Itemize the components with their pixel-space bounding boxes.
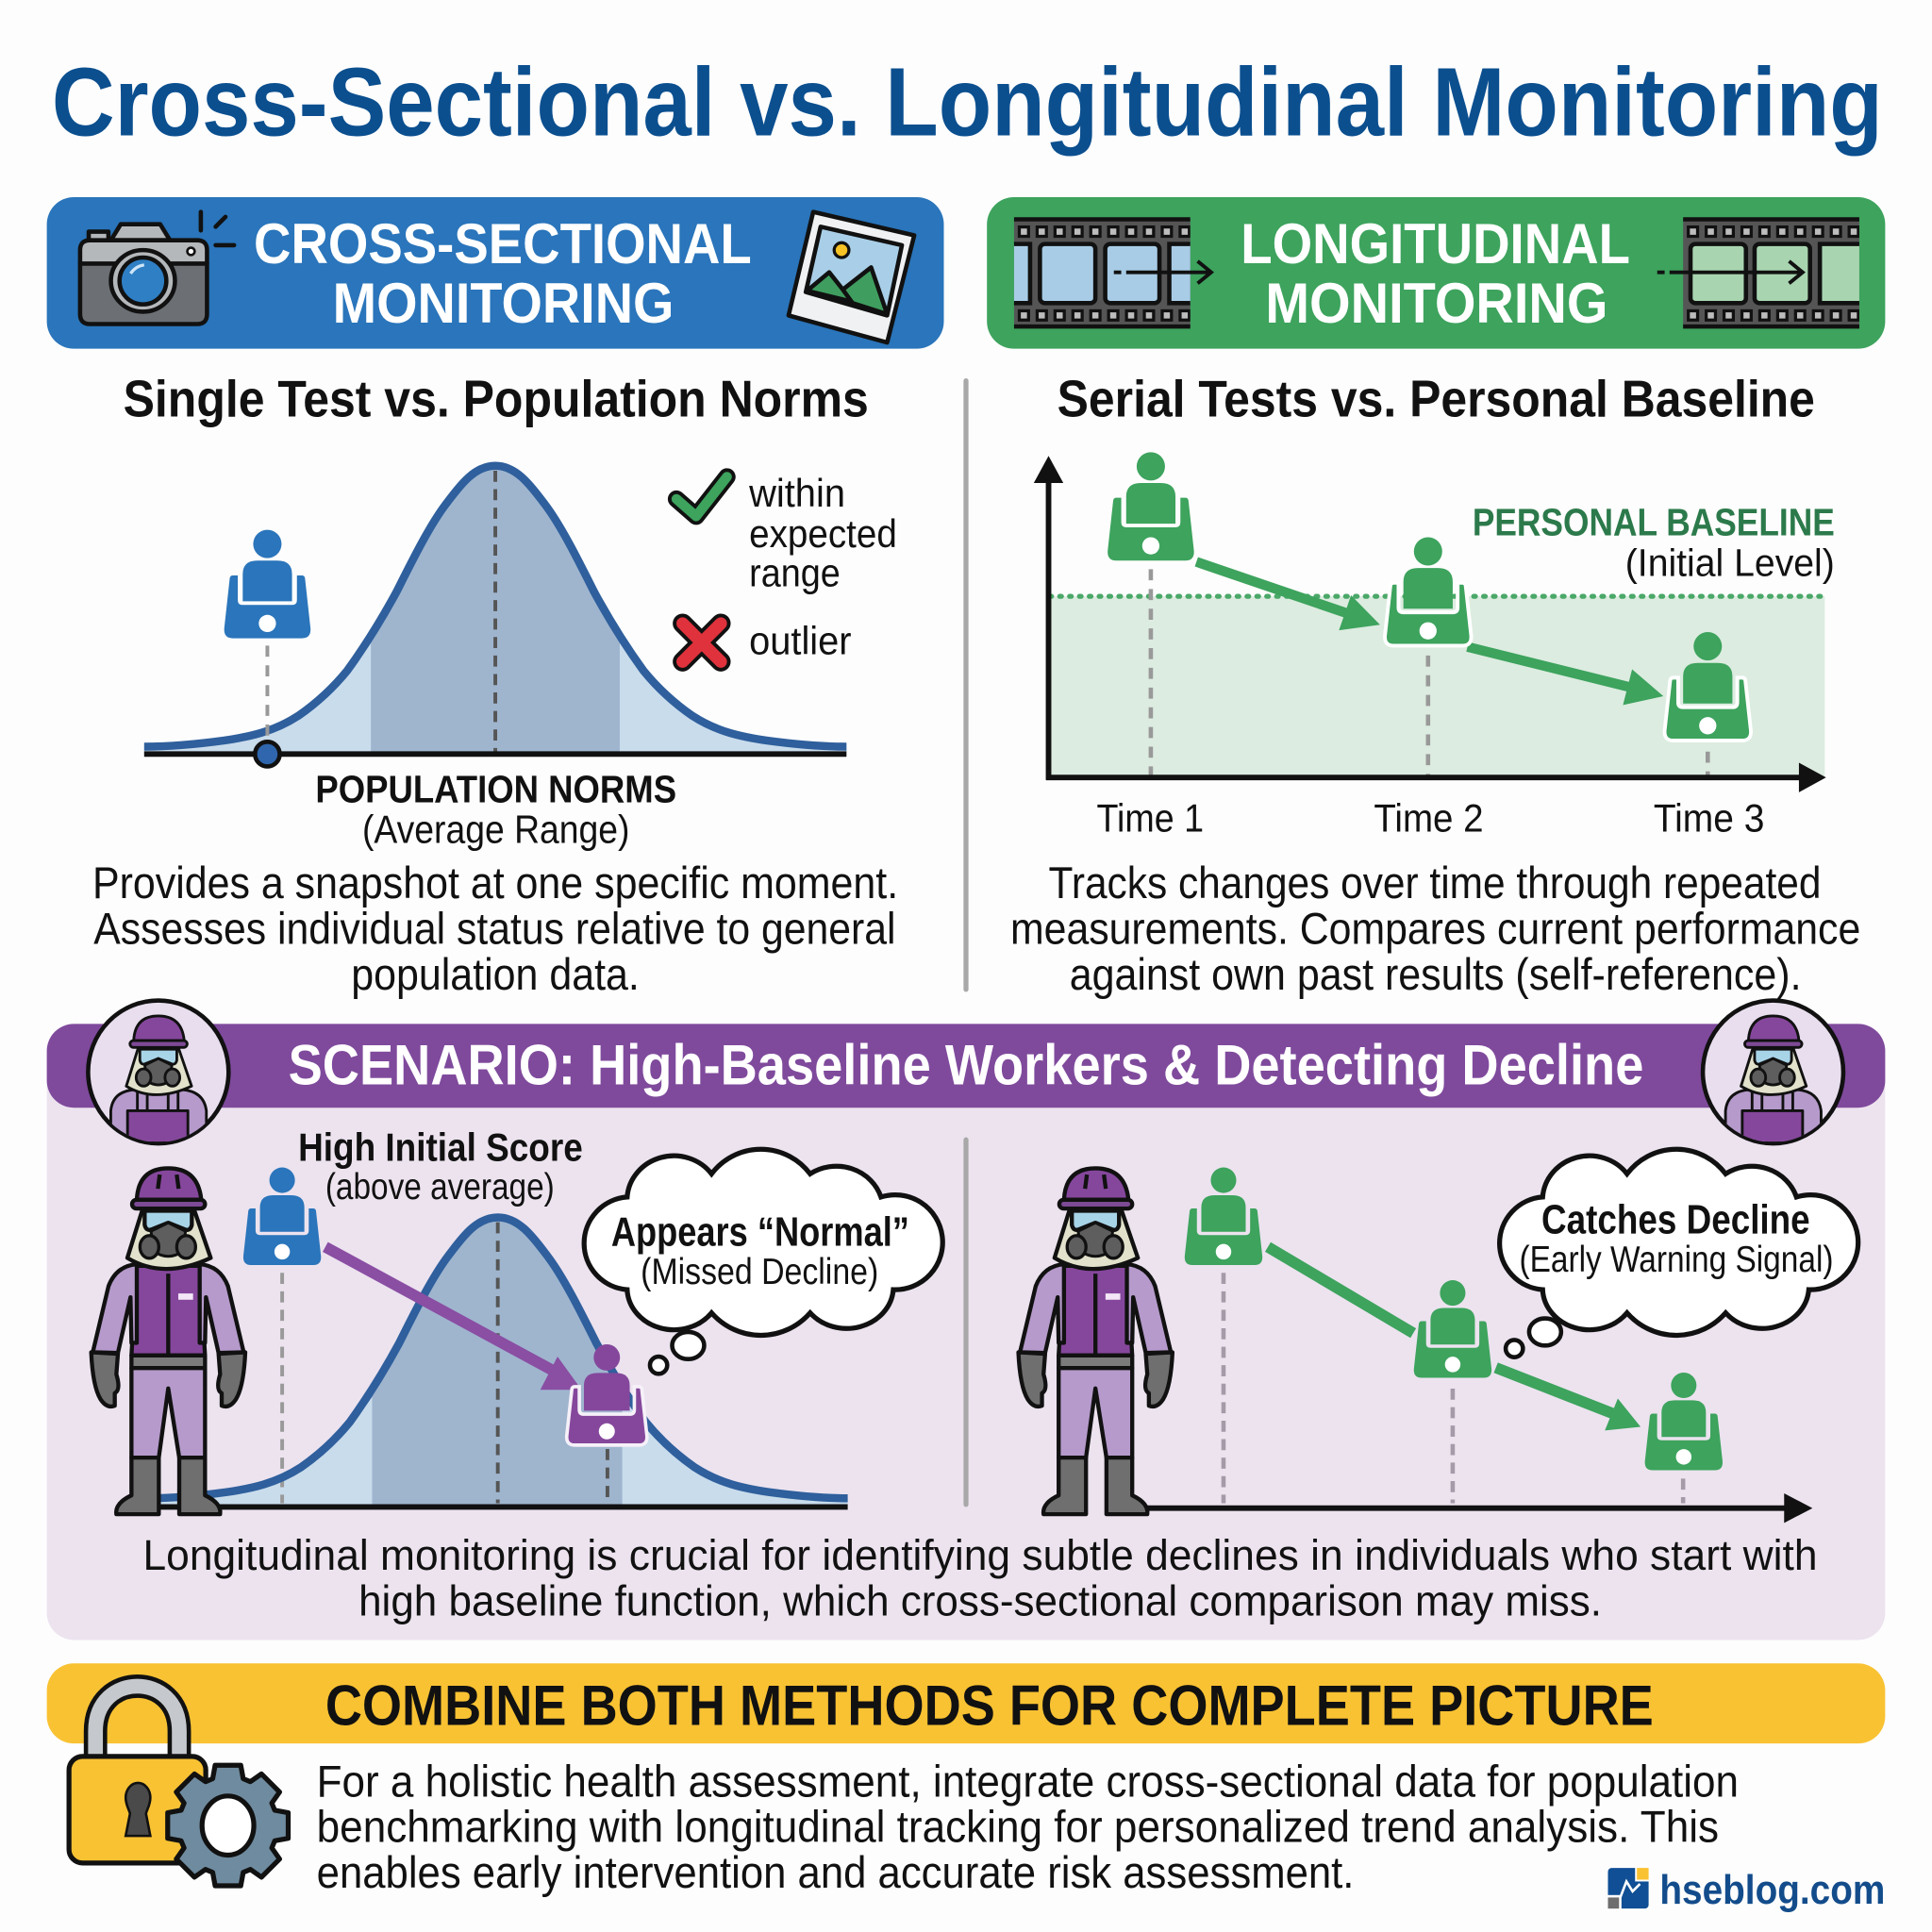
axis labels: time: Time 3 <box>1654 796 1764 841</box>
label: high initial score: (above average) <box>325 1167 555 1208</box>
legend: within expected range <box>676 471 897 595</box>
text block: longitudinal description <box>1010 858 1860 999</box>
label: personal baseline <box>1473 501 1835 585</box>
icon: camera <box>80 212 234 325</box>
axis labels: time: Time 1 <box>1096 796 1204 841</box>
arrow: green segment 1 <box>1268 1247 1413 1333</box>
icon: instant photo <box>789 212 914 342</box>
chart label: population norms: POPULATION NORMS <box>315 767 676 810</box>
icon: gear <box>168 1765 289 1886</box>
label: personal baseline: PERSONAL BASELINE <box>1473 501 1835 544</box>
heading: scenario bar: SCENARIO: High-Baseline Workers & Detecting Decline <box>289 1033 1643 1096</box>
legend: outlier <box>683 619 852 663</box>
chart label: population norms: (Average Range) <box>362 807 629 851</box>
icon: blue person <box>225 530 310 639</box>
text block: cross-sectional description: Assesses individual status relative to general <box>93 903 896 953</box>
text block: scenario summary: Longitudinal monitoring is crucial for identifying subtle declines in individuals who start with <box>143 1531 1818 1579</box>
heading: combine both methods: COMBINE BOTH METHODS FOR COMPLETE PICTURE <box>325 1674 1654 1738</box>
heading: longitudinal monitoring: LONGITUDINAL <box>1241 212 1630 275</box>
text block: longitudinal description: against own past results (self-reference). <box>1070 949 1802 999</box>
label: personal baseline: (Initial Level) <box>1625 541 1835 585</box>
icon: green person time 2 <box>1385 537 1472 645</box>
icon: worker medallion left <box>88 1001 228 1143</box>
legend: within expected range: range <box>749 551 841 595</box>
heading: cross-sectional monitoring <box>254 212 752 335</box>
arrow: purple decline <box>325 1247 581 1390</box>
icon: purple person <box>567 1344 647 1445</box>
text block: scenario summary: high baseline function, which cross-sectional comparison may miss. <box>358 1576 1602 1624</box>
icon: green person 2 <box>1414 1280 1491 1378</box>
text block: cross-sectional description: population data. <box>351 949 640 999</box>
icon: full worker left <box>92 1168 245 1514</box>
text block: cross-sectional description: Provides a snapshot at one specific moment. <box>92 858 898 908</box>
icon: green person time 1 <box>1108 452 1194 560</box>
heading: cross-sectional monitoring: MONITORING <box>333 272 674 335</box>
icon: blue person high score <box>243 1168 321 1265</box>
legend: outlier: outlier <box>749 619 852 663</box>
icon: padlock <box>69 1686 206 1863</box>
icon: full worker right <box>1019 1168 1173 1514</box>
chart: population bell curve <box>144 466 846 766</box>
callout: catches decline: Catches Decline <box>1541 1197 1810 1242</box>
label: high initial score: High Initial Score <box>298 1124 583 1169</box>
panel: longitudinal header <box>987 197 1885 349</box>
text block: scenario summary <box>143 1531 1818 1624</box>
axis labels: time: Time 2 <box>1374 796 1484 841</box>
legend: within expected range: expected <box>749 511 897 556</box>
callout: catches decline: (Early Warning Signal) <box>1519 1240 1834 1280</box>
icon: worker medallion right <box>1703 1001 1843 1143</box>
heading: longitudinal monitoring <box>1241 212 1630 335</box>
heading: longitudinal monitoring: MONITORING <box>1265 272 1607 335</box>
logo: hseblog.com: hseblog.com <box>1659 1868 1885 1913</box>
callout: appears normal <box>584 1149 942 1374</box>
text block: combine description: enables early intervention and accurate risk assessment. <box>317 1847 1354 1897</box>
chart: personal baseline over time <box>1034 452 1835 841</box>
text block: combine description <box>317 1756 1739 1897</box>
arrow: green segment 2 <box>1496 1368 1641 1430</box>
text block: combine description: benchmarking with longitudinal tracking for personalized trend analysis. This <box>317 1802 1719 1852</box>
label: high initial score <box>298 1124 583 1208</box>
panel: cross-sectional header <box>47 197 943 349</box>
text block: longitudinal description: Tracks changes over time through repeated <box>1049 858 1821 908</box>
heading: combine both methods <box>47 1663 1885 1743</box>
heading: cross-sectional monitoring: CROSS-SECTIONAL <box>254 212 752 275</box>
icon: green person 3 <box>1645 1373 1723 1470</box>
icon: film strip left <box>1014 219 1211 327</box>
arrow: time 2 to 3 <box>1468 647 1663 705</box>
text block: combine description: For a holistic health assessment, integrate cross-sectional data for population <box>317 1756 1739 1806</box>
chart: scenario bell curve <box>146 1217 848 1507</box>
icon: green person time 3 <box>1665 632 1751 741</box>
callout: catches decline <box>1500 1149 1858 1357</box>
chart label: population norms <box>315 767 676 851</box>
icon: film strip right <box>1657 219 1859 327</box>
axis labels: time <box>1096 796 1764 841</box>
text block: cross-sectional description <box>92 858 898 999</box>
legend: within expected range: within <box>748 471 845 515</box>
arrow: time 1 to 2 <box>1196 562 1380 630</box>
heading: serial tests: Serial Tests vs. Personal Baseline <box>1058 369 1815 427</box>
icon: green person 1 <box>1185 1168 1262 1265</box>
heading: single test: Single Test vs. Population Norms <box>124 369 869 427</box>
callout: appears normal: (Missed Decline) <box>641 1252 878 1292</box>
heading: scenario bar <box>47 1024 1885 1108</box>
chart: serial decline <box>1146 1168 1812 1523</box>
text block: longitudinal description: measurements. Compares current performance <box>1010 903 1860 953</box>
panel: scenario <box>47 1001 1885 1640</box>
callout: appears normal: Appears “Normal” <box>611 1209 909 1255</box>
